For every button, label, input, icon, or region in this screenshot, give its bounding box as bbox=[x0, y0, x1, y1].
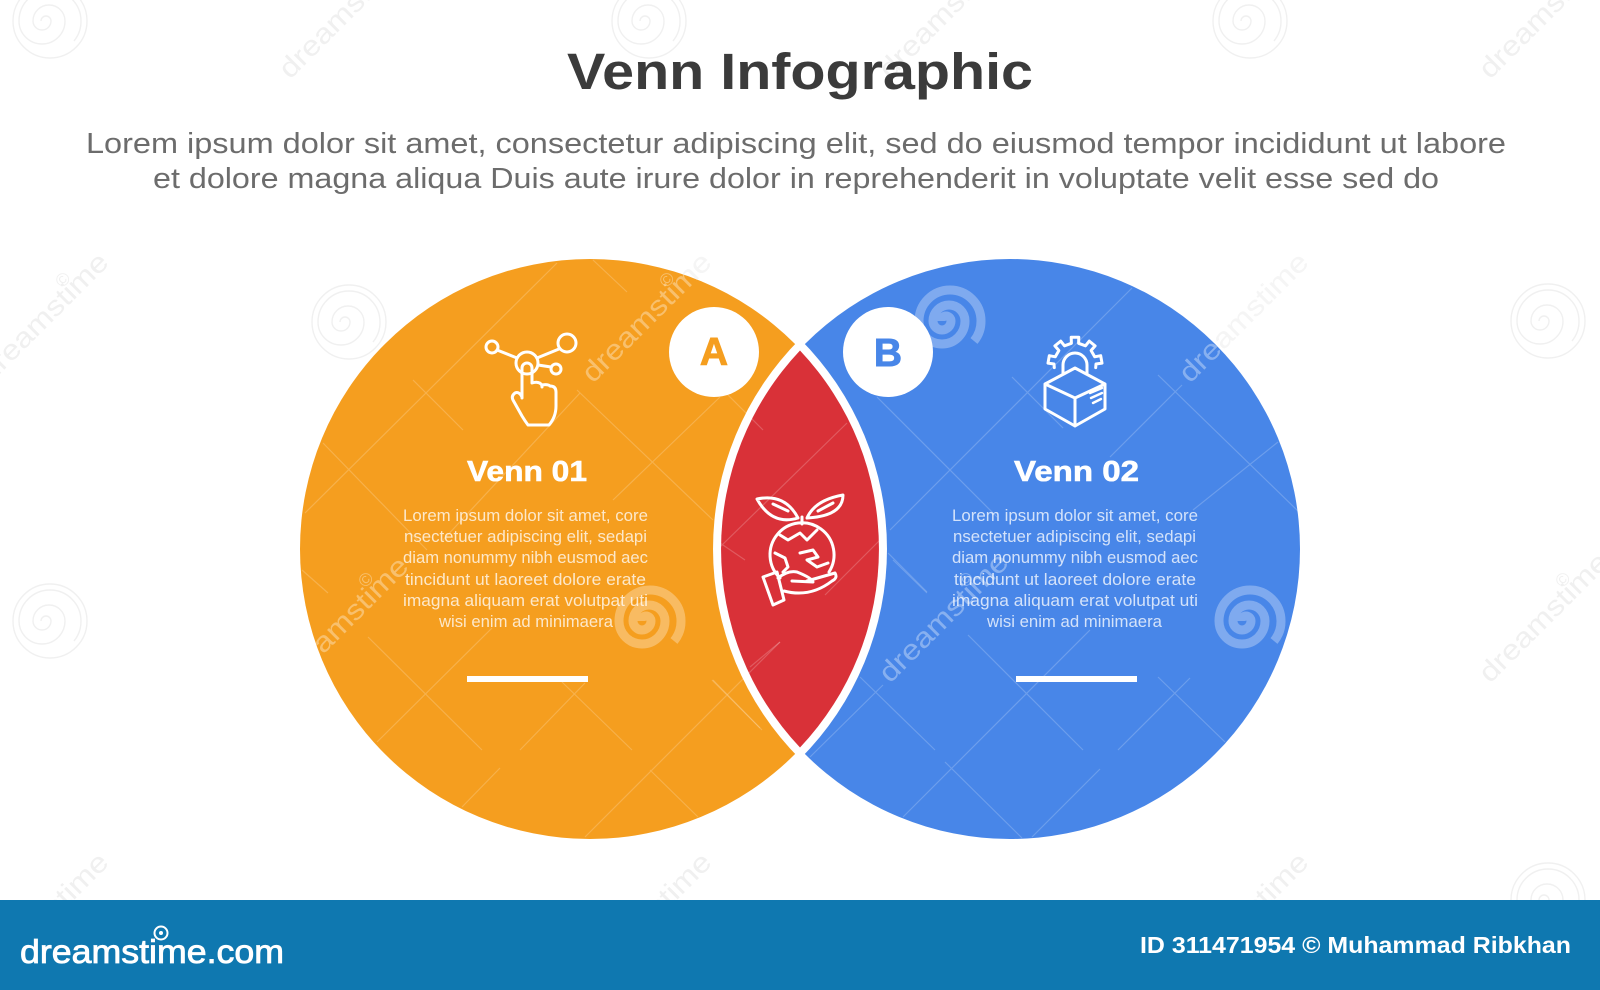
watermark text on white: dreamstime bbox=[1172, 846, 1314, 988]
watermark grid lines and marks over circles: dreamstime bbox=[272, 550, 414, 692]
badge A bbox=[669, 307, 759, 397]
watermark grid lines and marks over circles: © bbox=[954, 568, 978, 592]
body text: Venn 02: diam nonummy nibh eusmod aec bbox=[952, 548, 1198, 567]
watermark text on white: © bbox=[1551, 568, 1575, 592]
watermark text on white: dreamstime bbox=[575, 846, 717, 988]
footer band bbox=[0, 900, 1600, 990]
icon: plant globe in hand bbox=[757, 495, 843, 605]
watermark text on white: dreamstime bbox=[575, 246, 717, 388]
badge B bbox=[843, 307, 933, 397]
body text: Venn 01: imagna aliquam erat volutpat uti bbox=[403, 591, 648, 610]
body text: Venn 02: imagna aliquam erat volutpat uti bbox=[952, 591, 1198, 610]
body text: Venn 02: wisi enim ad minimaera bbox=[986, 612, 1163, 631]
heading: Venn 01: Venn 01 bbox=[467, 456, 587, 488]
watermark text on white: dreamstime bbox=[1172, 246, 1314, 388]
body text: Venn 01 bbox=[403, 506, 648, 631]
watermark text on white: dreamstime bbox=[1472, 546, 1600, 688]
body text: Venn 01: diam nonummy nibh eusmod aec bbox=[403, 548, 648, 567]
overlap lens red bbox=[721, 350, 879, 748]
circle A orange bbox=[300, 259, 880, 839]
circle B blue bbox=[720, 259, 1300, 839]
body text: Venn 02: nsectetuer adipiscing elit, sedapi bbox=[953, 527, 1196, 546]
watermark grid lines and marks over circles: © bbox=[354, 568, 378, 592]
footer credit: ID 311471954 © Muhammad Ribkhan bbox=[1140, 932, 1571, 958]
title: Venn Infographic bbox=[567, 43, 1033, 100]
panel: Venn 01 content bbox=[403, 334, 648, 682]
watermark grid lines and marks over circles: dreamstime bbox=[575, 246, 717, 388]
watermark grid lines and marks over circles bbox=[272, 246, 1314, 838]
divider line: Venn 01 bbox=[467, 676, 588, 682]
body text: Venn 01: Lorem ipsum dolor sit amet, core bbox=[403, 506, 648, 525]
panel: Venn 02 content bbox=[952, 337, 1198, 682]
body text: Venn 02 bbox=[952, 506, 1198, 631]
divider line: Venn 02 bbox=[1016, 676, 1137, 682]
icon: box with gear bbox=[1045, 337, 1105, 426]
body text: Venn 02: tincidunt ut laoreet dolore erate bbox=[954, 570, 1196, 589]
badge A: A bbox=[700, 331, 728, 374]
heading: Venn 02: Venn 02 bbox=[1014, 456, 1139, 488]
footer logo: dreamstime.com bbox=[20, 933, 284, 970]
icon: hand touching network bbox=[486, 334, 576, 425]
badge B: B bbox=[874, 332, 902, 375]
body text: Venn 01: nsectetuer adipiscing elit, sedapi bbox=[404, 527, 647, 546]
overlap white outline bbox=[713, 339, 887, 759]
subtitle text block: Lorem ipsum dolor sit amet, consectetur adipiscing elit, sed do eiusmod tempor incididunt ut labore bbox=[86, 128, 1506, 160]
watermark grid lines and marks over circles: © bbox=[1254, 268, 1278, 292]
watermark text on white: © bbox=[51, 268, 75, 292]
watermark grid lines and marks over circles: dreamstime bbox=[872, 546, 1014, 688]
body text: Venn 02: Lorem ipsum dolor sit amet, core bbox=[952, 506, 1198, 525]
body text: Venn 01: wisi enim ad minimaera bbox=[438, 612, 614, 631]
subtitle text block bbox=[86, 128, 1506, 195]
body text: Venn 01: tincidunt ut laoreet dolore erate bbox=[405, 570, 646, 589]
watermark grid lines and marks over circles: © bbox=[655, 268, 679, 292]
subtitle text block: et dolore magna aliqua Duis aute irure dolor in reprehenderit in voluptate velit esse sed do bbox=[153, 163, 1439, 195]
watermark grid lines and marks over circles: dreamstime bbox=[1172, 246, 1314, 388]
